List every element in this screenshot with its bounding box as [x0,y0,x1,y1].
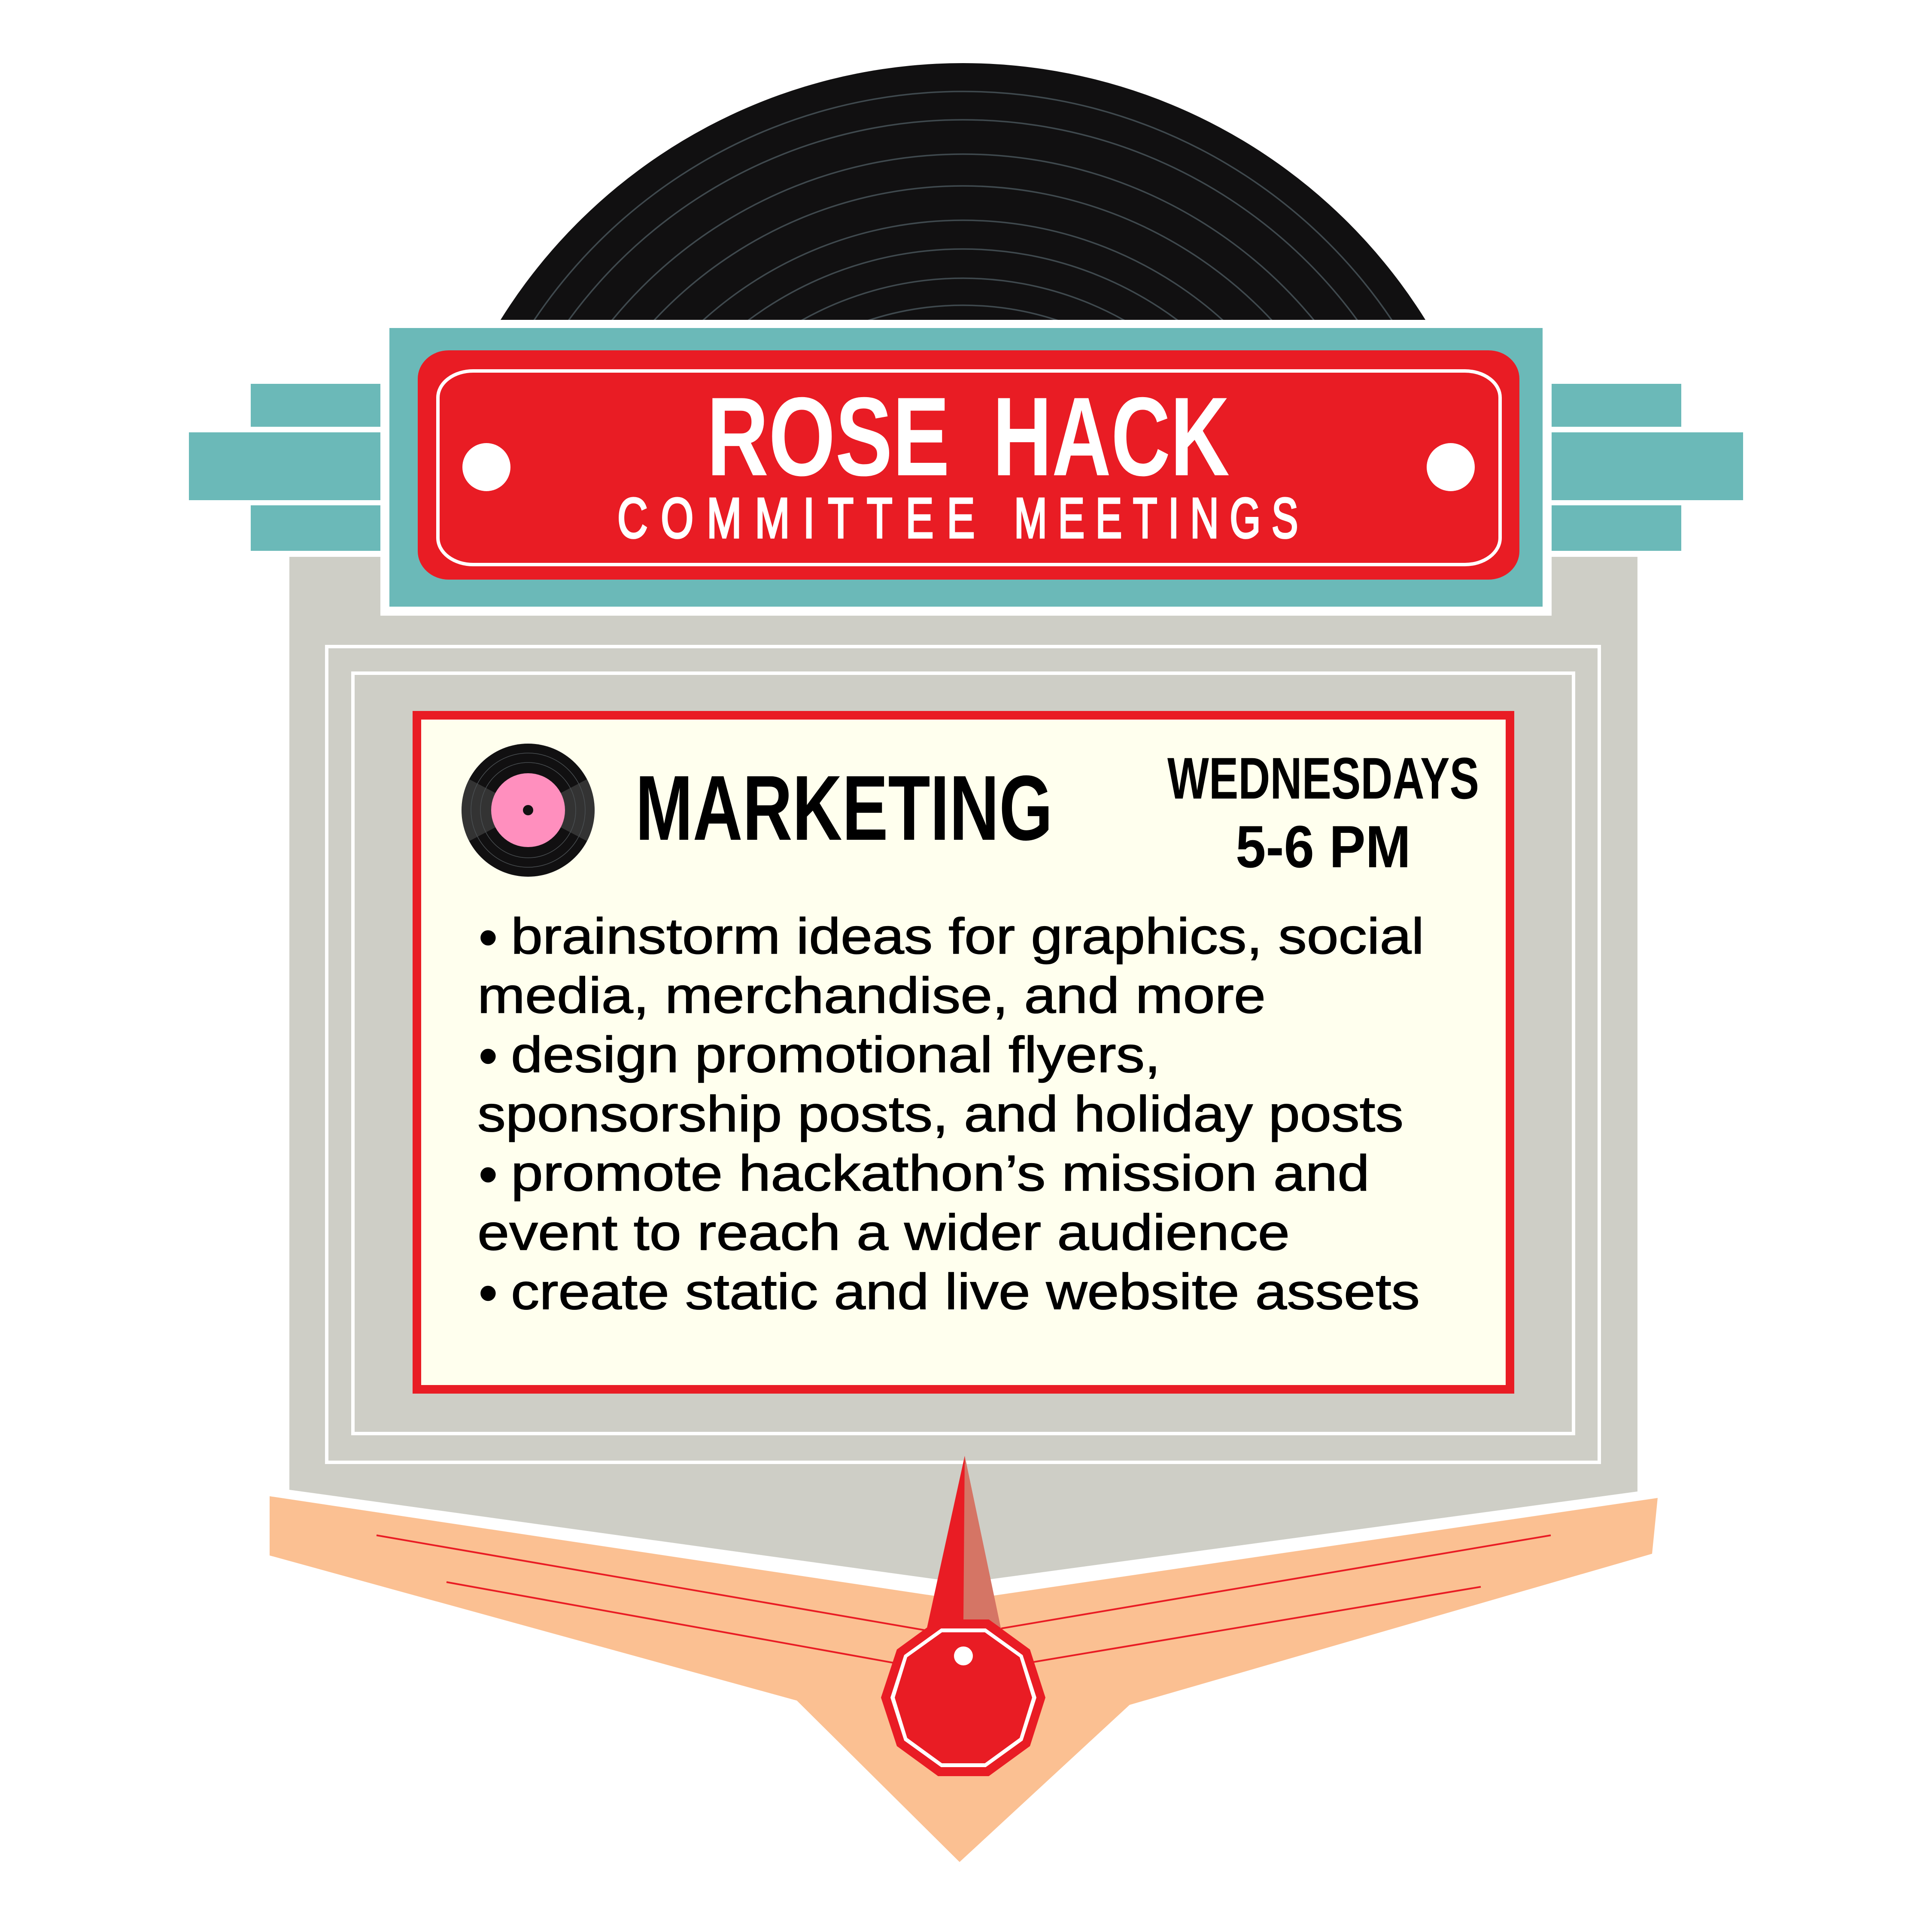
decorative red line: left upper [377,1535,925,1630]
icon: jukebox knob with needle [881,1456,1045,1776]
inner frame lines [327,647,1599,1462]
icon: small vinyl record [462,744,595,877]
icon: left rivet [462,443,510,491]
title: ROSE [707,374,950,499]
text: duties list: • [479,1263,498,1323]
text: duties list: • [479,1026,498,1086]
text: duties list: media, merchandise, and more [477,967,1266,1024]
panel: content card [417,715,1510,1389]
text: meeting time: 5-6 PM [1236,814,1411,880]
subtitle: MEETINGS [1014,487,1298,550]
icon: vinyl record arc [501,63,1425,320]
text: meeting day: WEDNESDAYS [1167,746,1479,811]
text: duties list [477,908,1424,1323]
text: duties list: design promotional flyers, [511,1027,1160,1083]
side bars: right [1552,384,1743,551]
panel: title plate [380,320,1552,616]
title [707,374,1230,499]
subtitle [617,486,1298,550]
text: duties list: create static and live website assets [511,1264,1420,1320]
text: duties list: brainstorm ideas for graphics, social [511,908,1424,965]
panel: gray jukebox body [289,557,1637,1583]
text: duties list: • [479,1145,498,1204]
side bars: left [189,384,380,551]
decorative red line: right lower [1034,1587,1481,1662]
text: duties list: • [479,908,498,967]
panel: peach base [270,1496,1658,1862]
decorative red line: right upper [1001,1535,1551,1628]
text: duties list: sponsorship posts, and holiday posts [477,1086,1403,1142]
text: duties list: event to reach a wider audience [477,1204,1290,1261]
icon: right rivet [1427,443,1475,491]
heading: marketing: MARKETING [635,756,1053,860]
subtitle: COMMITTEE [617,486,975,550]
title: HACK [993,374,1230,499]
decorative red line: left lower [447,1582,893,1663]
text: duties list: promote hackathon’s mission and [511,1145,1370,1202]
